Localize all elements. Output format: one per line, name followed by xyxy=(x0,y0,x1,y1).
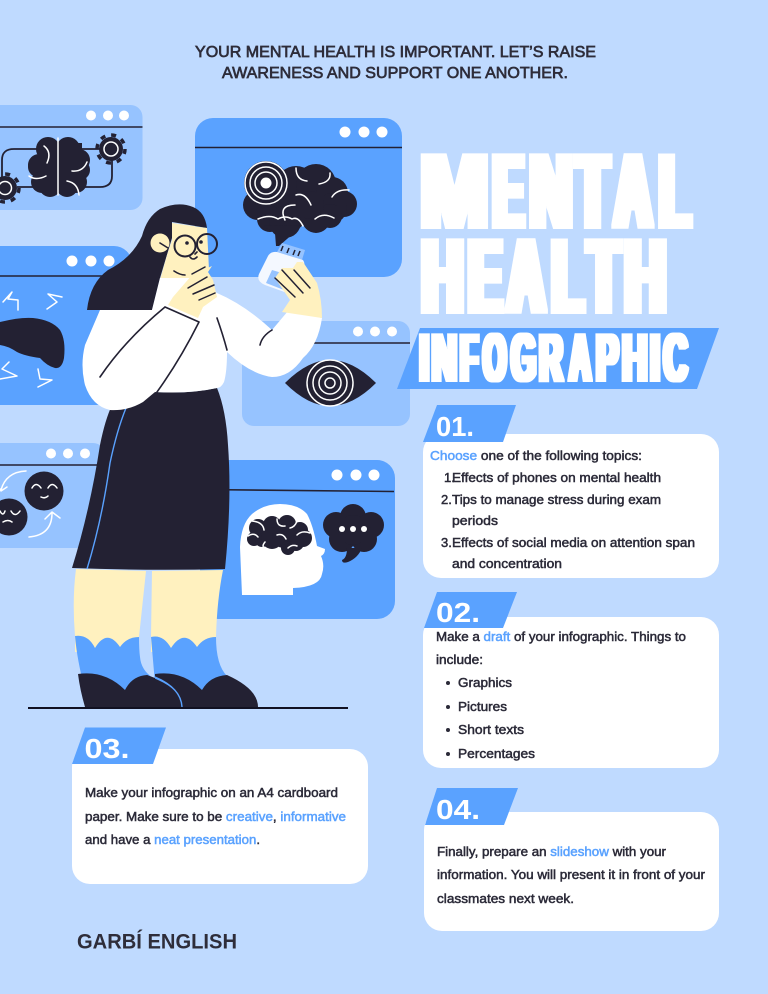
ribbon: infographic: I xyxy=(650,320,660,396)
panel: step 04: classmates next week. xyxy=(437,891,574,906)
title: mental health: N xyxy=(530,134,572,250)
header tagline: AWARENESS AND SUPPORT ONE ANOTHER. xyxy=(222,65,568,82)
panel: step 02: Percentages xyxy=(458,746,536,761)
panel: step 01: periods xyxy=(452,513,499,528)
title: mental health: L xyxy=(552,219,583,335)
panel: window with moods xyxy=(0,443,105,548)
panel: step 01: Tips to manage stress during exam xyxy=(452,492,661,507)
title: mental health xyxy=(420,134,690,335)
panel: step 01 xyxy=(423,405,719,578)
ribbon: infographic xyxy=(397,320,719,396)
panel: step 01: Choose one of the following topics: xyxy=(430,448,642,463)
text: L xyxy=(660,134,690,250)
header tagline xyxy=(195,44,596,82)
ribbon: infographic: G xyxy=(511,320,536,396)
panel: step 03: Make your infographic on an A4 cardboard xyxy=(85,785,338,800)
panel: step 03: paper. Make sure to be creative, informative xyxy=(85,809,346,824)
ribbon: infographic: P xyxy=(596,320,618,396)
title: mental health: A xyxy=(508,219,544,335)
ribbon: infographic: R xyxy=(539,320,563,396)
panel: step 01: Effects of social media on attention span xyxy=(452,535,695,550)
panel: step 04 xyxy=(424,788,719,931)
title: mental health: A xyxy=(615,134,651,250)
panel: step 02: Pictures xyxy=(458,699,508,714)
panel: window with head and speech bubble xyxy=(200,460,395,619)
header tagline: YOUR MENTAL HEALTH IS IMPORTANT. LET’S RAISE xyxy=(195,44,596,61)
ribbon: infographic: C xyxy=(664,320,687,396)
title: mental health: H xyxy=(625,219,666,335)
panel: step 04: information. You will present it in front of your xyxy=(437,867,706,882)
panel: window with eye xyxy=(242,321,410,426)
panel: step 02: 02. xyxy=(436,597,480,628)
panel: window with liver xyxy=(0,246,132,405)
panel: step 01: 1. xyxy=(444,470,455,485)
panel: step 01: 2. xyxy=(441,492,452,507)
panel: step 02: Short texts xyxy=(458,722,525,737)
ribbon: infographic: A xyxy=(570,320,591,396)
illustration: woman with glasses xyxy=(28,204,348,708)
ribbon: infographic: H xyxy=(622,320,647,396)
panel: step 03 xyxy=(72,728,368,884)
footer: author name: GARBÍ ENGLISH xyxy=(77,930,237,954)
panel: window with brain and target xyxy=(195,118,402,277)
panel: step 02: include: xyxy=(436,652,483,667)
panel: step 01: 01. xyxy=(436,411,474,442)
title: mental health: T xyxy=(577,134,608,250)
title: mental health: T xyxy=(588,219,619,335)
panel: step 03: 03. xyxy=(84,733,130,764)
panel: step 02: Graphics xyxy=(458,675,513,690)
panel: window with brain and gears xyxy=(0,105,142,210)
panel: step 03: and have a neat presentation. xyxy=(85,832,260,847)
title: mental health: E xyxy=(469,219,501,335)
ribbon: infographic: O xyxy=(483,320,506,396)
ribbon: infographic: I xyxy=(420,320,429,396)
title: mental health: M xyxy=(420,134,488,250)
title: mental health: H xyxy=(422,219,463,335)
title: mental health: E xyxy=(494,134,523,250)
panel: step 01: and concentration xyxy=(452,556,562,571)
panel: step 02 xyxy=(423,592,719,768)
panel: step 02: Make a draft of your infographic. Things to xyxy=(436,629,686,644)
ribbon: infographic: F xyxy=(460,320,478,396)
panel: step 04: 04. xyxy=(436,794,480,825)
panel: step 01: 3. xyxy=(441,535,452,550)
panel: step 01: Effects of phones on mental health xyxy=(452,470,661,485)
panel: step 04: Finally, prepare an slideshow with your xyxy=(437,844,667,859)
ribbon: infographic: N xyxy=(432,320,457,396)
